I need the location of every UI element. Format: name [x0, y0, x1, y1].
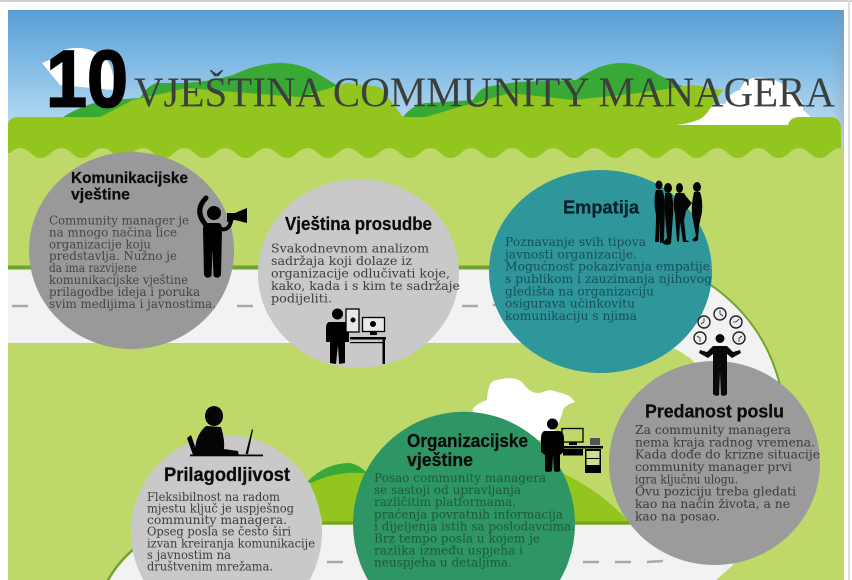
body text: i dijeljenja istih sa poslodavcima.	[374, 518, 575, 533]
icon: man with megaphone	[200, 198, 247, 278]
body text: Poznavanje svih tipova	[505, 234, 647, 249]
body text: s javnostim na	[147, 547, 231, 562]
body text: igra ključnu ulogu.	[635, 471, 738, 486]
panel: Komunikacijske vještine	[29, 152, 247, 349]
panel: Empatija	[489, 170, 712, 373]
heading: Predanost poslu	[645, 400, 784, 422]
body text: podijeliti.	[271, 290, 332, 306]
body text: Kada dođe do krizne situacije	[635, 447, 820, 462]
heading: Prilagodljivost	[164, 464, 290, 486]
body text: različitim platformama,	[374, 494, 516, 509]
heading: Organizacijske	[407, 430, 528, 451]
body text: community manager prvi	[635, 459, 792, 474]
body text: kao na način života, a ne	[635, 496, 790, 511]
body text: neuspjeha u detaljima.	[374, 555, 512, 570]
body text: community managera.	[147, 512, 287, 527]
title	[46, 34, 836, 124]
heading: Empatija	[563, 198, 640, 218]
body text: Ovu poziciju treba gledati	[635, 484, 796, 499]
body text	[374, 470, 575, 570]
body text: Mogućnost pokazivanja empatije	[505, 259, 710, 274]
body text: javnosti organizacije.	[503, 246, 637, 261]
body text: da ima razvijene	[49, 260, 137, 275]
body text: kao na posao.	[635, 508, 720, 523]
body text: nema kraja radnog vremena.	[635, 434, 815, 449]
body text	[635, 422, 820, 523]
heading: vještine	[407, 449, 473, 470]
icon: man juggling clocks	[694, 308, 745, 396]
panel: Prilagodljivost	[131, 406, 322, 580]
body text: organizacije odlučivati koje,	[271, 266, 450, 280]
body text: Brz tempo posla u kojem je	[374, 530, 540, 546]
heading: Vještina prosudbe	[285, 214, 432, 234]
panel: Vještina prosudbe	[258, 179, 460, 368]
heading: vještine	[71, 186, 130, 204]
panel: Predanost poslu	[609, 308, 820, 565]
body text: razlika između uspjeha i	[374, 543, 523, 558]
body text: kako, kada i s kim te sadržaje	[271, 278, 460, 293]
panel: Organizacijske vještine	[353, 412, 603, 580]
body text: predstavlja. Nužno je	[49, 248, 177, 263]
body text: na mnogo načina lice	[49, 224, 177, 239]
heading: Komunikacijske	[71, 170, 188, 187]
body text: organizacije koju	[49, 236, 151, 251]
body text	[271, 240, 460, 306]
icon: man at laptop	[187, 406, 263, 456]
body text: komunikaciju s njima	[505, 308, 638, 323]
body text: Community manager je	[49, 212, 189, 228]
body text: gledišta na organizaciju	[505, 283, 654, 298]
body text: Fleksibilnost na radom	[147, 489, 280, 504]
body text: izvan kreiranja komunikacije	[147, 535, 315, 550]
body text: društvenim mrežama.	[147, 558, 273, 574]
body text: praćenja povratnih informacija	[374, 506, 564, 521]
body text: svim medijima i javnostima.	[49, 296, 216, 311]
body text: s publikom i zauzimanja njihovog	[505, 271, 712, 286]
body text: osigurava učinkovitu	[505, 296, 635, 311]
icon: man at computers	[326, 308, 386, 364]
body text: komunikacijske vještine	[49, 272, 188, 287]
body text: Svakodnevnom analizom	[271, 240, 429, 256]
icon: man at desk	[541, 418, 603, 473]
body text: se sastoji od upravljanja	[374, 482, 522, 497]
body text	[503, 234, 712, 323]
body text	[49, 212, 216, 311]
body text: Za community managera	[635, 422, 792, 437]
body text: prilagodbe ideja i poruka	[49, 284, 201, 299]
body text: Opseg posla se često širi	[147, 524, 291, 539]
body text: mjestu ključ je uspješnog	[147, 501, 294, 516]
body text: Posao community managera	[374, 470, 547, 485]
body text: sadržaja koji dolaze iz	[271, 253, 412, 268]
title: 10	[46, 34, 128, 124]
body text	[147, 489, 315, 574]
icon: group of people	[654, 180, 702, 245]
title: VJEŠTINA COMMUNITY MANAGERA	[134, 70, 836, 116]
